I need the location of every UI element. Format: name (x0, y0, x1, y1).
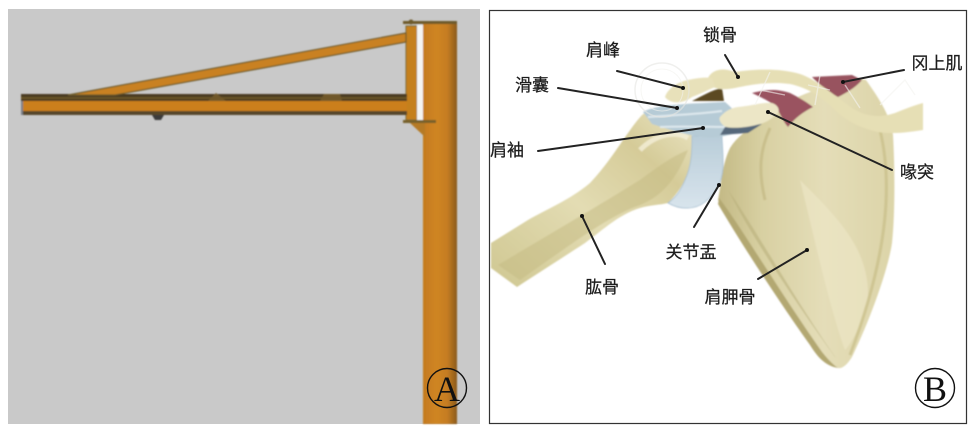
crane column (403, 21, 457, 424)
bursa and cuff (643, 102, 745, 137)
label: humerus (580, 214, 619, 297)
crane structure (21, 20, 457, 424)
label B (916, 368, 954, 409)
coracoid (719, 103, 779, 128)
supraspinatus muscle (752, 75, 862, 127)
label: rotator cuff: 肩袖 (490, 141, 524, 160)
crane mast bracket (403, 20, 436, 137)
label: glenoid: 关节盂 (666, 243, 716, 262)
label: scapula (704, 248, 809, 307)
label: coracoid (766, 110, 934, 182)
panel B: shoulder anatomy (490, 10, 966, 424)
label: humerus: 肱骨 (585, 278, 619, 297)
label A (428, 368, 466, 409)
label: scapula: 肩胛骨 (704, 288, 756, 307)
crane diagonal brace (68, 33, 406, 95)
leader lines and labels (490, 26, 962, 307)
label: bursa: 滑囊 (515, 76, 549, 95)
label B: B (923, 369, 947, 409)
glenoid capsule (668, 136, 723, 208)
watermark (635, 63, 915, 117)
acromion (665, 78, 715, 102)
scapula (718, 78, 894, 368)
panel A: crane photo (8, 9, 480, 424)
clavicle (708, 70, 923, 133)
label: bursa (515, 76, 679, 110)
label: acromion: 肩峰 (586, 41, 620, 60)
label: rotator cuff (490, 126, 705, 160)
label: clavicle (703, 26, 740, 79)
label: supraspinatus (841, 54, 962, 84)
label: coracoid: 喙突 (900, 163, 934, 182)
label: glenoid (666, 183, 721, 262)
label A: A (434, 369, 460, 409)
label: supraspinatus: 冈上肌 (912, 54, 962, 73)
label: acromion (586, 41, 685, 90)
crane boom (21, 93, 407, 120)
shoulder illustration (491, 70, 923, 368)
humerus (491, 109, 693, 287)
label: clavicle: 锁骨 (703, 26, 737, 45)
